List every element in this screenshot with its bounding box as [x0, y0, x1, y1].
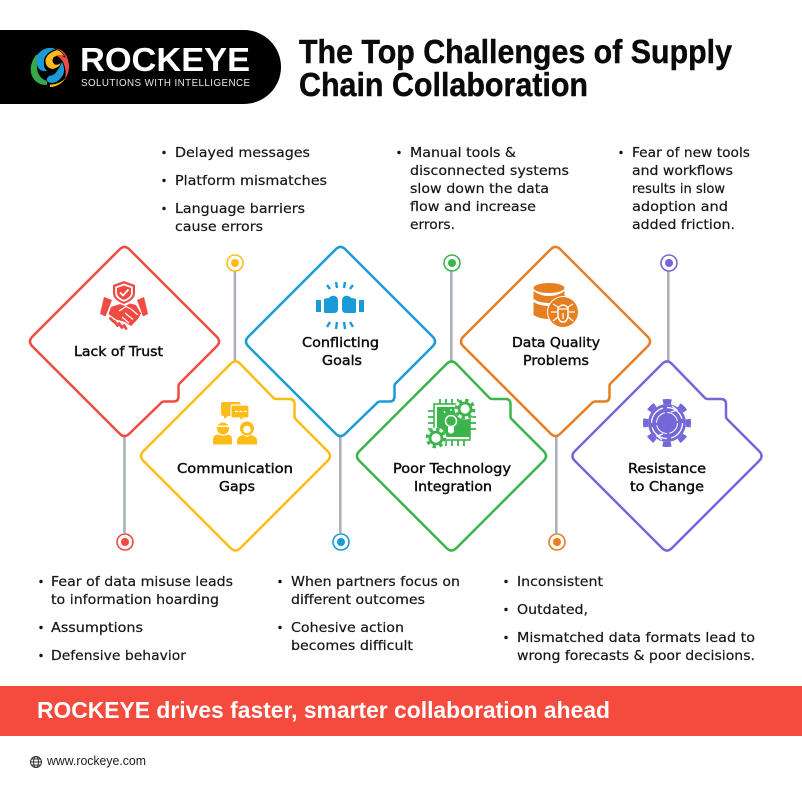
text block: poor technology details: flow and increase [410, 199, 536, 215]
label: Poor Technology [393, 461, 511, 477]
text block: data quality details: Outdated, [517, 602, 588, 618]
icon: gear with cycle arrows [646, 402, 688, 444]
label [177, 461, 293, 495]
title [299, 34, 732, 104]
website address: www.rockeye.com [46, 754, 146, 768]
logo wordmark: ROCKEYE [80, 41, 250, 78]
text block: lack of trust details: Assumptions [51, 620, 143, 636]
logo badge [0, 30, 281, 104]
label: Conflicting [302, 335, 379, 351]
panel: resistance to change [572, 362, 762, 550]
title: Chain Collaboration [299, 67, 588, 104]
icon: database with bug [534, 283, 579, 328]
icon: two people talking [213, 402, 257, 444]
panel: conflicting goals [246, 247, 435, 436]
icon: boxing gloves clash [316, 282, 364, 329]
panel: data quality problems [461, 247, 650, 436]
banner: ROCKEYE drives faster, smarter collaboration ahead [37, 697, 610, 723]
text block: lack of trust details: to information hoarding [51, 592, 219, 608]
text block: poor technology details [397, 145, 569, 233]
text block: conflicting goals details: different outcomes [291, 592, 425, 608]
text block: data quality details: Mismatched data formats lead to [517, 630, 755, 646]
icon: handshake with shield [100, 281, 148, 328]
text block: data quality details [504, 574, 755, 664]
label: Integration [414, 479, 492, 495]
text block: communication gaps details: cause errors [175, 219, 263, 235]
footer website [30, 754, 146, 768]
label [628, 461, 706, 495]
panel: communication gaps [141, 362, 330, 550]
label [302, 335, 379, 369]
text block: communication gaps details: Delayed messages [175, 145, 310, 161]
text block: data quality details: wrong forecasts & poor decisions. [517, 648, 755, 664]
icon: logo swirl [31, 48, 69, 87]
text block: resistance details: and workflows [632, 163, 733, 179]
text block: resistance details [619, 145, 750, 233]
label: Gaps [219, 479, 255, 495]
text block: lack of trust details: Fear of data misuse leads [51, 574, 233, 590]
label: to Change [630, 479, 704, 495]
text block: resistance details: added friction. [632, 217, 735, 233]
connector: conflicting goals [333, 437, 349, 550]
panel: lack of trust [30, 247, 219, 436]
text block: poor technology details: errors. [410, 217, 455, 233]
connector: lack of trust [117, 437, 133, 550]
text block: resistance details: adoption and [632, 199, 728, 215]
label [512, 335, 600, 369]
logo tagline: SOLUTIONS WITH INTELLIGENCE [81, 78, 250, 89]
text block: communication gaps details [162, 145, 327, 235]
text block: lack of trust details [39, 574, 233, 664]
connector: communication gaps [227, 255, 243, 362]
text block: communication gaps details: Platform mismatches [175, 173, 327, 189]
text block: conflicting goals details: When partners focus on [291, 574, 460, 590]
text block: data quality details: Inconsistent [517, 574, 603, 590]
connector: poor technology integration [444, 255, 460, 362]
label: Resistance [628, 461, 706, 477]
banner [0, 686, 802, 736]
text block: lack of trust details: Defensive behavior [51, 648, 186, 664]
label: Communication [177, 461, 293, 477]
label [393, 461, 511, 495]
text block: poor technology details: Manual tools & [410, 145, 516, 161]
text block: poor technology details: slow down the data [410, 181, 549, 197]
title: The Top Challenges of Supply [299, 34, 732, 71]
panel: poor technology integration [357, 362, 546, 550]
icon: globe [30, 756, 42, 768]
text block: communication gaps details: Language barriers [175, 201, 305, 217]
connector: resistance to change [661, 255, 677, 362]
connector: data quality problems [549, 437, 565, 550]
label: Problems [523, 353, 589, 369]
text block: conflicting goals details [278, 574, 460, 654]
label: Goals [322, 353, 362, 369]
label: Data Quality [512, 335, 600, 351]
label: Lack of Trust [74, 344, 163, 360]
text block: conflicting goals details: Cohesive action [291, 620, 404, 636]
text block: resistance details: Fear of new tools [632, 145, 750, 161]
text block: resistance details: results in slow [632, 181, 725, 197]
icon: circuit chip with bulb and gears [426, 398, 476, 448]
text block: conflicting goals details: becomes difficult [291, 638, 413, 654]
text block: poor technology details: disconnected systems [410, 163, 569, 179]
